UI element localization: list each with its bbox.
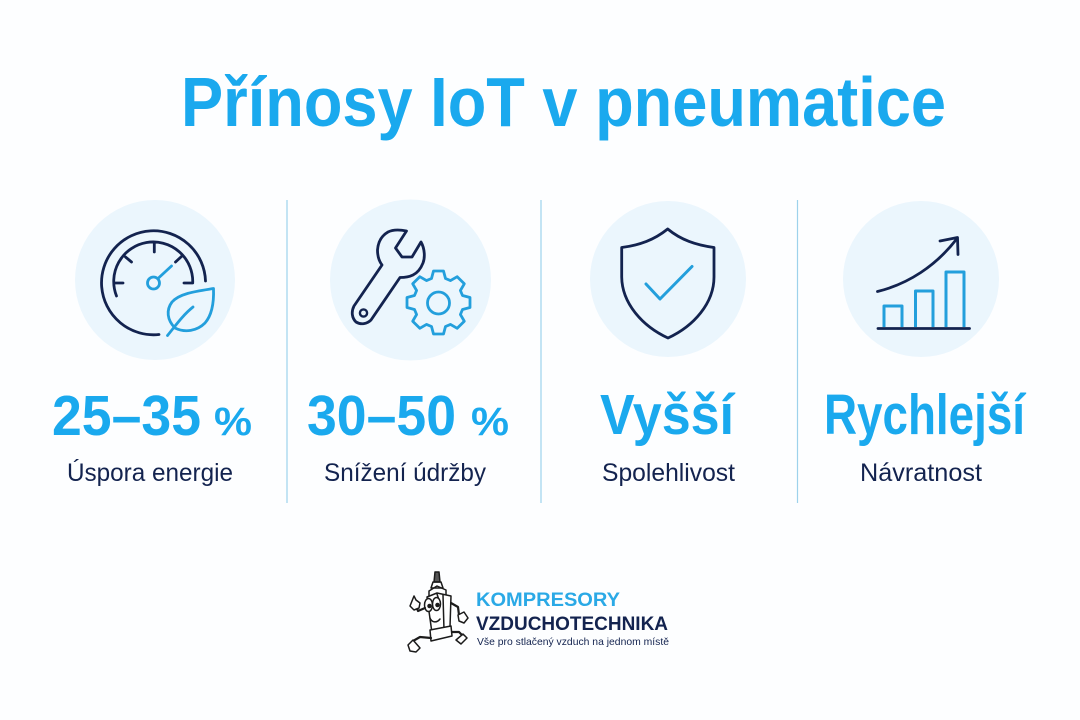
icon: gauge with leaf — [75, 200, 235, 360]
panel: reliability — [590, 201, 746, 487]
brand name: KOMPRESORY: KOMPRESORY — [476, 590, 620, 611]
label: energy savings: Úspora energie — [67, 458, 233, 487]
stat unit: percent: % — [471, 400, 509, 444]
stat: higher: Vyšší — [600, 383, 736, 447]
title: Přínosy IoT v pneumatice — [181, 63, 946, 141]
tagline: Vše pro stlačený vzduch na jednom místě — [477, 636, 669, 648]
label: maintenance reduction: Snížení údržby — [324, 459, 486, 487]
panel: energy savings — [52, 200, 252, 487]
panel: maintenance reduction — [307, 200, 509, 487]
panel: payback — [824, 201, 1027, 487]
icon: shield with check — [590, 201, 746, 357]
icon: rising bar chart — [843, 201, 999, 357]
label: reliability: Spolehlivost — [602, 459, 735, 487]
icon: compressor mascot — [408, 572, 468, 652]
logo — [408, 572, 669, 652]
stat: 30–50 %: 30–50 — [307, 384, 456, 448]
brand name: VZDUCHOTECHNIKA: VZDUCHOTECHNIKA — [476, 614, 668, 635]
stat unit: percent: % — [214, 400, 252, 444]
label: payback: Návratnost — [860, 459, 982, 487]
stat: 25–35 %: 25–35 — [52, 384, 201, 448]
icon: wrench and gear — [330, 200, 491, 360]
stat: faster: Rychlejší — [824, 383, 1027, 447]
